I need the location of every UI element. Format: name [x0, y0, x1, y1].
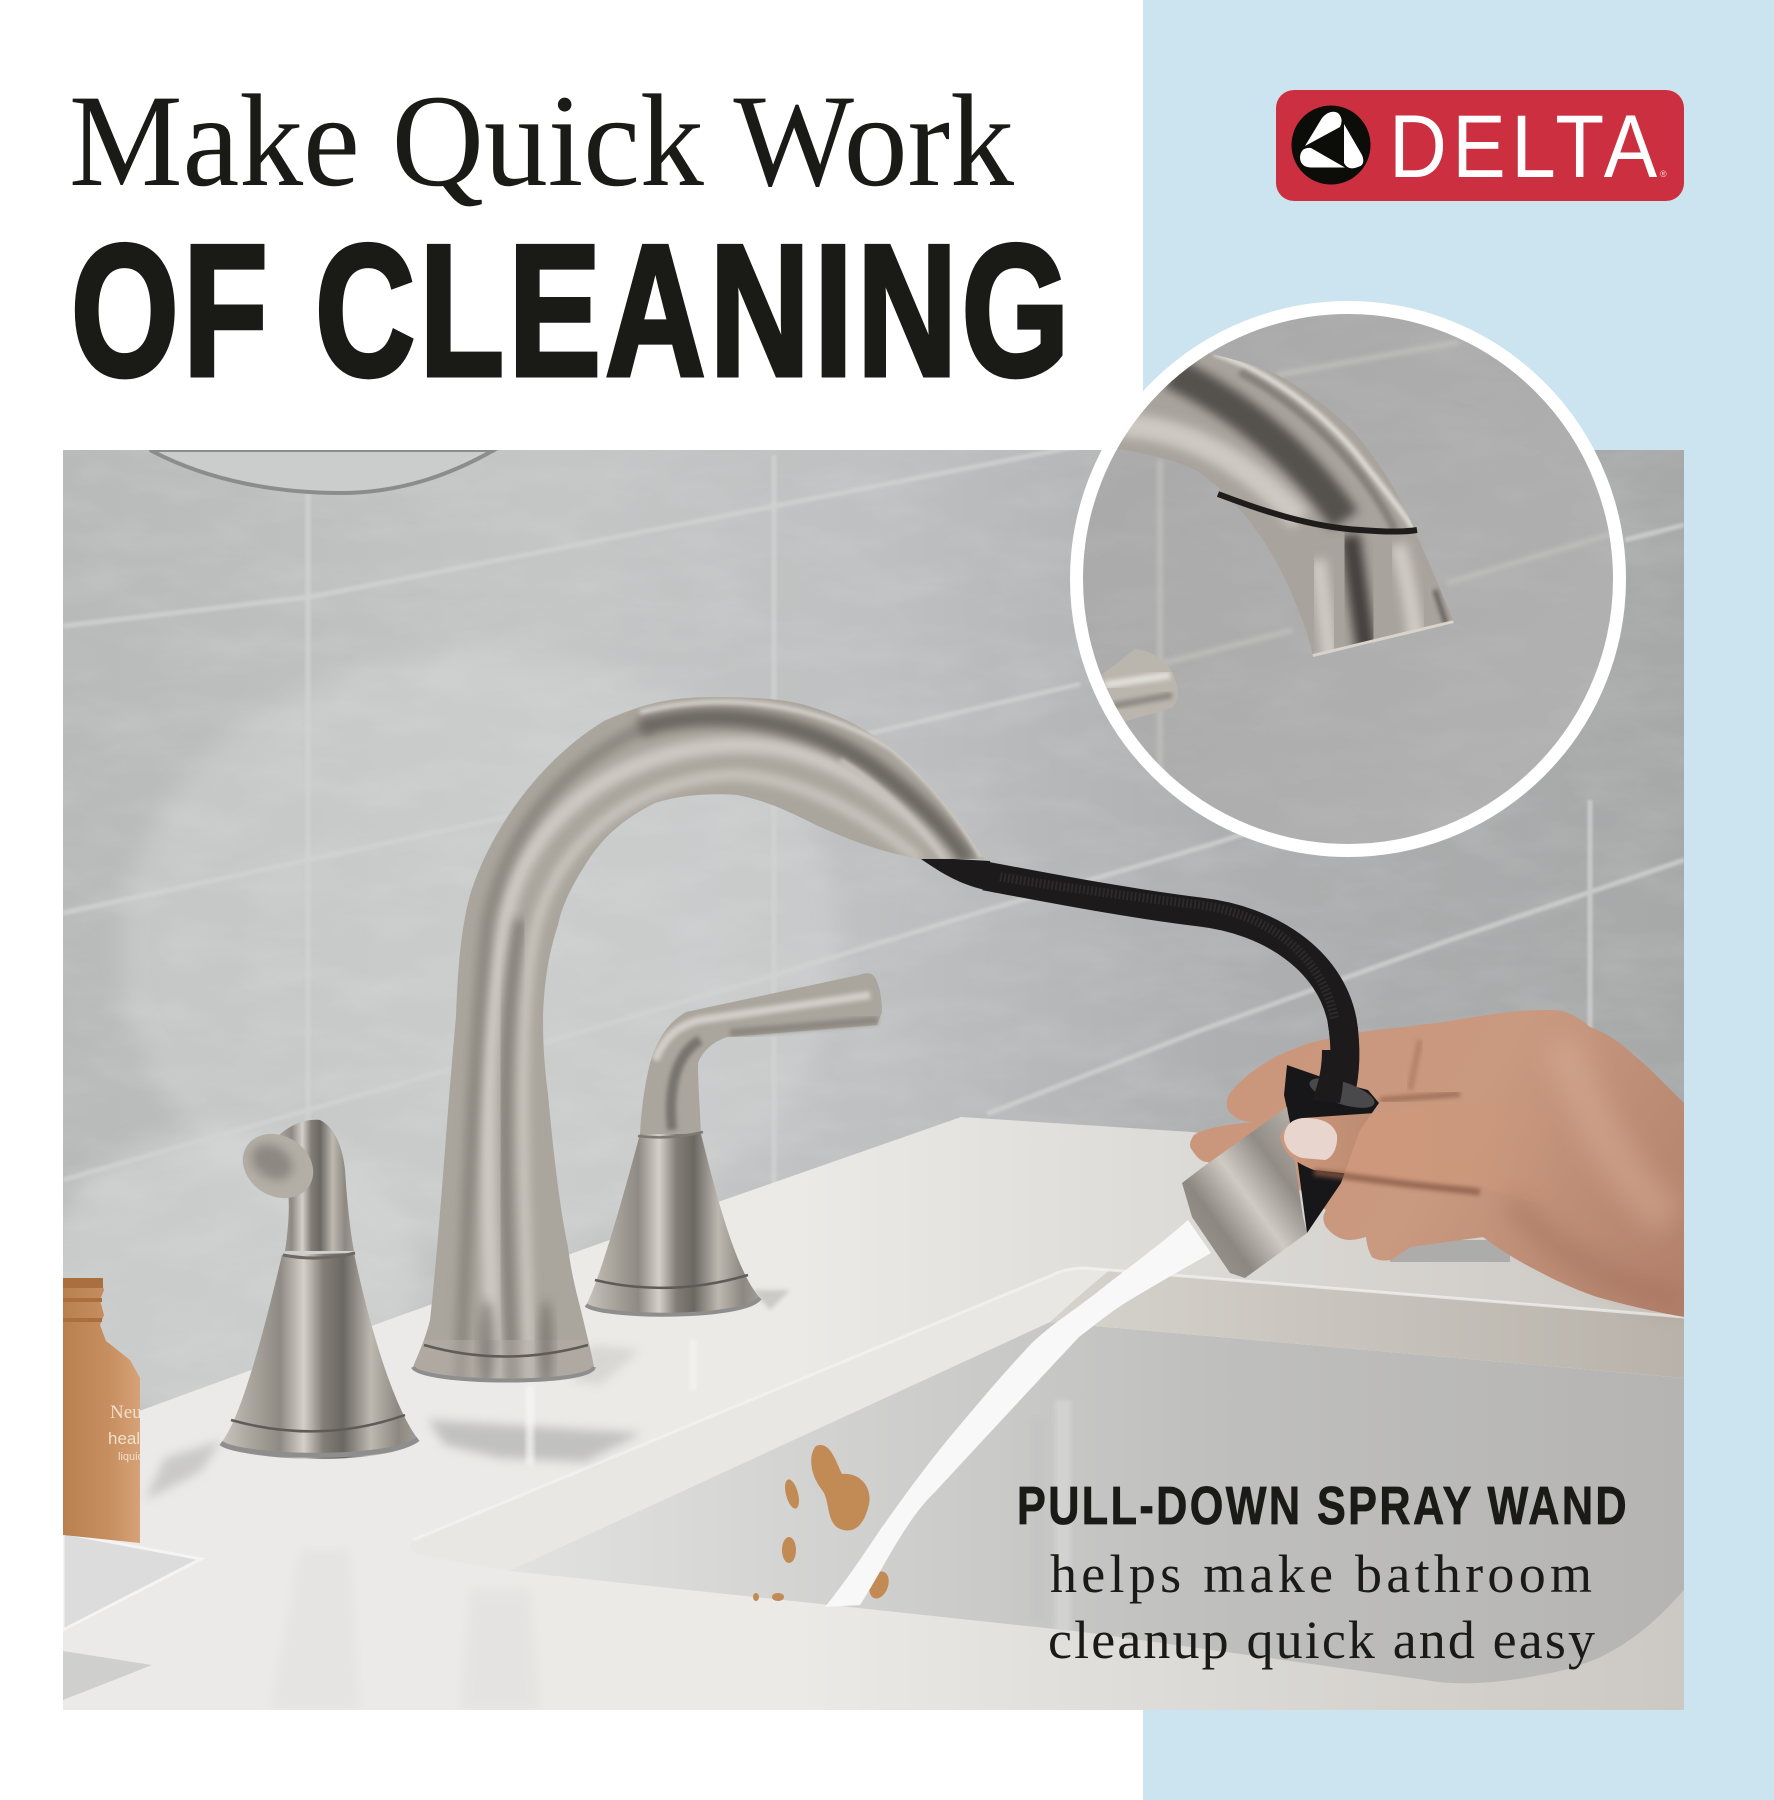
- thumb and hand shading: [1280, 1040, 1680, 1300]
- blue background panel: [1143, 0, 1774, 1800]
- foundation bottle: health: [108, 1429, 154, 1448]
- inset spout seam: [1218, 494, 1417, 532]
- water stream: [825, 1220, 1211, 1607]
- inset white ring: [1076, 308, 1620, 850]
- spray hose: [921, 859, 1358, 1038]
- title line 1: Make Quick Work: [69, 67, 1014, 214]
- callout heading: PULL-DOWN SPRAY WAND: [1017, 1477, 1627, 1536]
- foundation bottle: liquid: [118, 1451, 144, 1463]
- foundation bottle: Neutr: [110, 1402, 154, 1423]
- soap dish behind hand: [1390, 1240, 1510, 1262]
- inset circle: spout close-up: [1060, 300, 1630, 860]
- panel: bathroom photo scene: [40, 442, 1684, 1710]
- spray wand head: [1182, 1050, 1379, 1278]
- callout text: [1017, 1477, 1627, 1670]
- inset wall background: [1083, 314, 1610, 830]
- logo red badge: [1276, 90, 1684, 201]
- registered mark: ®: [1660, 169, 1667, 179]
- inset small handle cone: [1090, 649, 1178, 722]
- faucet body: [410, 697, 984, 1390]
- tray: [63, 1533, 201, 1700]
- foundation bottle: [63, 1278, 140, 1543]
- title line 2: OF CLEANING: [71, 206, 1069, 415]
- logo: Delta: [1276, 90, 1684, 201]
- sink basin: [509, 1322, 1684, 1683]
- foundation stain: [753, 1445, 892, 1601]
- mirror: [150, 450, 494, 493]
- counter shadows and reflections: [145, 1290, 790, 1710]
- logo wordmark: DELTA: [1389, 96, 1658, 196]
- vanity countertop: [63, 1117, 1684, 1710]
- logo emblem: [1292, 106, 1370, 184]
- title: [69, 67, 1069, 415]
- callout line 2: cleanup quick and easy: [1048, 1610, 1595, 1670]
- tile wall: [63, 450, 1684, 1411]
- hose end at wand: [1340, 1020, 1345, 1095]
- hand: [1190, 1010, 1684, 1317]
- sink lip: [500, 1266, 1684, 1503]
- left handle: [221, 1120, 418, 1459]
- callout line 1: helps make bathroom: [1050, 1544, 1592, 1604]
- counter front below sink: [63, 1560, 1684, 1710]
- inset spout: [1100, 353, 1454, 660]
- right handle: [586, 973, 882, 1316]
